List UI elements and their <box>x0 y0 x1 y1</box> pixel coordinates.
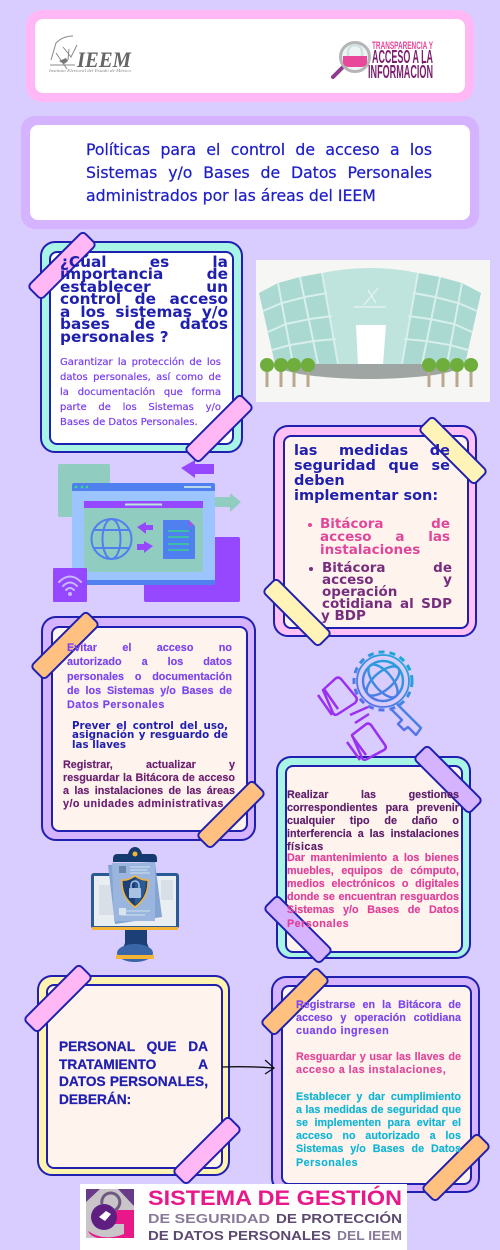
heading: personnel: DEBERÁN: <box>59 1092 131 1107</box>
text: prevent damage: interferencia a las instalaciones <box>287 828 459 840</box>
footer logo: sistema de gestion: DE SEGURIDAD <box>148 1211 270 1226</box>
text: register log <box>63 758 235 810</box>
text: security compliance <box>296 1090 461 1169</box>
decoration: tape bottom right of personnel card <box>171 1115 243 1186</box>
panel: title <box>21 116 479 229</box>
heading: security measures: las medidas de <box>294 442 450 458</box>
text: maintenance: donde se encuentran resguardos <box>287 891 459 903</box>
text: register log: resguardar la Bitácora de acceso <box>63 772 235 784</box>
text: security compliance: Personales <box>296 1157 358 1169</box>
icon: IEEM logo <box>49 36 132 73</box>
decoration: tape bottom left of measures card <box>261 577 333 648</box>
text: register log: Registrar, actualizar y <box>63 758 235 770</box>
text: keys: Resguardar y usar las llaves de <box>296 1050 461 1062</box>
panel: logo header <box>26 10 474 102</box>
footer logo: sistema de gestion <box>80 1184 407 1250</box>
list item: operation log: Bitácora de <box>322 560 452 576</box>
panel: card avoid access inner <box>51 626 248 832</box>
decoration: tape top left of personnel card <box>22 963 94 1034</box>
panel: card measures inner <box>283 435 469 629</box>
footer logo: sistema de gestion: DEL IEEM <box>337 1228 402 1243</box>
heading: personnel: DATOS PERSONALES, <box>59 1074 208 1089</box>
icon: IEEM logo: Instituto Electoral del Estado de México <box>49 68 132 73</box>
decoration: tape top left of avoid card <box>29 610 101 681</box>
text: avoid unauthorized access: personales o documentación <box>67 671 232 683</box>
icon: gear key and cards <box>317 650 422 762</box>
icon: IEEM logo: IEEM <box>76 47 132 72</box>
text: avoid unauthorized access: de los Sistemas y/o Bases de <box>67 685 232 697</box>
icon: transparencia logo <box>330 40 433 82</box>
heading: importance question: personales ? <box>60 328 169 346</box>
decoration: tape bottom right of duties card <box>420 1132 492 1203</box>
footer logo: sistema de gestion: DE DATOS PERSONALES <box>148 1228 331 1243</box>
text: avoid unauthorized access: autorizado a los datos <box>67 656 232 668</box>
text: avoid unauthorized access: Datos Personales <box>67 699 165 711</box>
text: key control: Prever el control del uso, <box>72 720 228 732</box>
text: importance answer <box>60 356 221 428</box>
heading: importance question <box>60 252 228 346</box>
text: register on entry: Registrarse en la Bitácora de <box>296 998 461 1010</box>
text: maintenance: Dar mantenimiento a los bienes <box>287 852 459 864</box>
text: prevent damage: correspondientes para prevenir <box>287 802 459 814</box>
text: prevent damage <box>287 788 459 853</box>
decoration: tape top right of measures card <box>417 415 489 486</box>
text: keys <box>296 1050 461 1076</box>
text: keys: acceso a las instalaciones, <box>296 1064 446 1076</box>
list item: access log: instalaciones <box>320 542 420 558</box>
text: maintenance: Sistemas y/o Bases de Datos <box>287 904 459 916</box>
icon: building illustration <box>256 260 490 402</box>
text: register on entry <box>296 998 462 1037</box>
decoration: tape bottom left of maintenance card <box>262 894 334 965</box>
arrow: to duties <box>222 1060 275 1074</box>
footer logo: sistema de gestion: DE PROTECCIÓN <box>276 1211 402 1226</box>
title <box>86 140 432 205</box>
heading: security measures <box>294 442 450 504</box>
text: importance answer: Garantizar la protección de los <box>60 356 221 368</box>
text: security compliance: acceso no autorizado a los <box>296 1130 461 1142</box>
text: importance answer: Bases de Datos Personales. <box>60 416 198 428</box>
text: key control: las llaves <box>72 739 126 751</box>
text: register on entry: acceso y operación cotidiana <box>296 1012 461 1024</box>
heading: importance question: importancia de <box>60 265 228 283</box>
heading: importance question: establecer un <box>60 278 228 296</box>
text: avoid unauthorized access <box>67 642 232 711</box>
text: prevent damage: Realizar las gestiones <box>287 788 459 800</box>
text: key control <box>72 720 228 751</box>
text: security compliance: a las medidas de seguridad que <box>296 1104 461 1116</box>
panel: card importance <box>40 241 243 453</box>
heading: importance question: ¿Cúal es la <box>60 252 228 270</box>
text: maintenance <box>287 852 459 930</box>
panel: logo header inner <box>35 19 465 93</box>
heading: importance question: control de acceso <box>60 290 228 308</box>
heading: personnel: TRATAMIENTO A <box>59 1057 208 1072</box>
text: maintenance: Personales <box>287 918 349 930</box>
footer logo: sistema de gestion: SISTEMA DE GESTIÓN <box>148 1186 402 1210</box>
text: importance answer: la documentación que forma <box>60 386 221 398</box>
panel: card measures <box>273 425 477 637</box>
heading: personnel: PERSONAL QUE DA <box>59 1039 208 1054</box>
panel: card duties <box>271 976 480 1193</box>
heading: personnel <box>59 1039 208 1107</box>
text: register log: y/o unidades administrativas <box>63 798 224 810</box>
decoration: tape top right of maintenance card <box>412 744 484 815</box>
text: security compliance: Establecer y dar cumplimiento <box>296 1090 461 1102</box>
heading: importance question: a los sistemas y/o <box>60 302 228 320</box>
heading: security measures: seguridad que se <box>294 458 450 474</box>
list item: operation log: operación <box>322 584 397 600</box>
text: register on entry: cuando ingresen <box>296 1025 389 1037</box>
heading: importance question: bases de datos <box>60 315 228 333</box>
text: register log: a las instalaciones de las áreas <box>63 785 235 797</box>
heading: security measures: implementar son: <box>294 488 438 504</box>
list item: access log: Bitácora de <box>320 516 450 532</box>
text: maintenance: medios electrónicos o digitales <box>287 878 459 890</box>
bullet: access log <box>308 523 312 527</box>
list item: operation log: y BDP <box>321 608 366 624</box>
panel: card importance inner <box>49 251 234 445</box>
panel: card maintenance inner <box>285 765 463 953</box>
decoration: tape top left of importance card <box>26 230 98 301</box>
icon: security clipboard monitor <box>91 847 179 962</box>
bullet: operation log <box>309 567 313 571</box>
decoration: tape bottom right of importance card <box>183 393 255 464</box>
decoration: tape top left of duties card <box>259 966 331 1037</box>
panel: title inner <box>30 125 470 220</box>
text: security compliance: se implementen para evitar el <box>296 1117 461 1129</box>
text: avoid unauthorized access: Evitar el acceso no <box>67 642 232 654</box>
decoration: tape bottom right of avoid card <box>195 779 267 850</box>
text: maintenance: muebles, equipos de cómputo, <box>287 865 459 877</box>
panel: card maintenance <box>276 756 471 959</box>
list item: access log <box>320 516 450 558</box>
text: prevent damage: físicas <box>287 841 324 853</box>
text: key control: asignación y resguardo de <box>72 729 228 741</box>
panel: card personnel inner <box>46 984 223 1169</box>
text: importance answer: parte de los Sistemas y/o <box>60 402 221 412</box>
title: administrados por las áreas del IEEM <box>86 186 376 204</box>
heading: security measures: deben <box>294 472 345 488</box>
title: Políticas para el control de acceso a los <box>86 140 432 158</box>
list item: operation log: cotidiana al SDP <box>322 596 452 612</box>
list item: operation log: acceso y <box>322 572 452 588</box>
panel: card duties inner <box>281 985 472 1185</box>
text: security compliance: Sistemas y/o Bases de Datos <box>296 1143 461 1155</box>
list item: operation log <box>321 560 452 624</box>
list item: access log: acceso a las <box>320 529 450 545</box>
panel: card personnel <box>37 975 230 1176</box>
panel: card avoid access <box>41 616 256 841</box>
text: importance answer: datos personales, así como de <box>60 372 221 382</box>
icon: web window illustration <box>53 460 241 602</box>
title: Sistemas y/o Bases de Datos Personales <box>86 162 432 182</box>
text: prevent damage: cualquier tipo de daño o <box>287 815 459 827</box>
